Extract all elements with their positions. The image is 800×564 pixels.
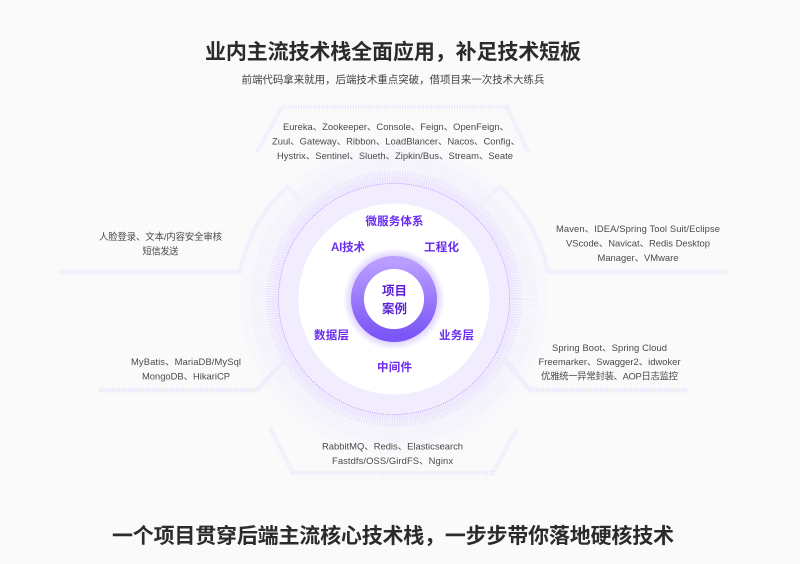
dotted ring — [278, 184, 510, 414]
connector: lower left — [99, 360, 285, 390]
text block: business layer — [538, 342, 680, 382]
central donut — [358, 262, 430, 336]
white inner disc — [298, 204, 490, 394]
title: 业内主流技术栈全面应用，补足技术短板 — [205, 40, 581, 64]
text block: microservices: Hystrix、Sentinel、Slueth、Zipkin/Bus、Stream、Seate — [277, 150, 513, 161]
outer faint halo — [240, 145, 548, 453]
bottom headline: 一个项目贯穿后端主流核心技术栈，一步步带你落地硬核技术 — [112, 524, 674, 548]
text block: microservices: Eureka、Zookeeper、Console、Feign、OpenFeign、 — [283, 121, 509, 132]
connector: lower right — [505, 360, 687, 390]
label: 工程化: 工程化 — [424, 240, 460, 254]
label: 数据层: 数据层 — [314, 328, 349, 342]
text block: data layer: MongoDB、HikariCP — [142, 370, 230, 382]
label: 业务层: 业务层 — [439, 328, 474, 342]
lavender band — [278, 184, 510, 414]
text block: business layer: 优雅统一异常封装、AOP日志监控 — [541, 370, 679, 382]
donut glow — [343, 248, 445, 350]
text block: middleware — [322, 440, 463, 466]
text block: AI: 人脸登录、文本/内容安全审核 — [99, 231, 223, 242]
text block: business layer: Spring Boot、Spring Cloud — [552, 342, 667, 353]
text block: data layer: MyBatis、MariaDB/MySql — [131, 356, 241, 367]
text block: AI — [99, 231, 223, 256]
text block: middleware: Fastdfs/OSS/GirdFS、Nginx — [332, 455, 453, 466]
text block: engineering: Maven、IDEA/Spring Tool Suit/Eclipse — [556, 223, 720, 234]
text block: AI: 短信发送 — [142, 246, 179, 256]
centre label: 案例 — [382, 301, 407, 316]
donut centre — [364, 269, 424, 329]
label: AI技术: AI技术 — [331, 240, 366, 254]
centre label — [382, 284, 407, 316]
label: 微服务体系: 微服务体系 — [366, 214, 424, 228]
text block: engineering: VScode、Navicat、Redis Desktop — [566, 238, 710, 248]
label: 中间件: 中间件 — [377, 360, 412, 374]
text block: engineering — [556, 223, 720, 263]
text block: data layer — [131, 356, 241, 382]
text block: engineering: Manager、VMware — [598, 252, 678, 263]
text block: middleware: RabbitMQ、Redis、Elasticsearch — [322, 440, 463, 452]
centre label: 项目 — [382, 284, 407, 298]
text block: business layer: Freemarker、Swagger2、idwoker — [538, 356, 680, 367]
concentric circle diagram — [240, 145, 548, 453]
outer tick ring — [258, 163, 530, 435]
text block: microservices — [272, 121, 520, 161]
connector: upper right — [480, 187, 728, 272]
text block: microservices: Zuul、Gateway、Ribbon、LoadBlancer、Nacos、Config、 — [272, 136, 520, 146]
tick ring — [272, 177, 516, 421]
connector: top bracket — [257, 107, 528, 152]
subtitle: 前端代码拿来就用，后端技术重点突破，借项目来一次技术大练兵 — [242, 73, 544, 86]
connector: bottom bracket — [270, 428, 517, 473]
connector: upper left — [59, 187, 308, 272]
